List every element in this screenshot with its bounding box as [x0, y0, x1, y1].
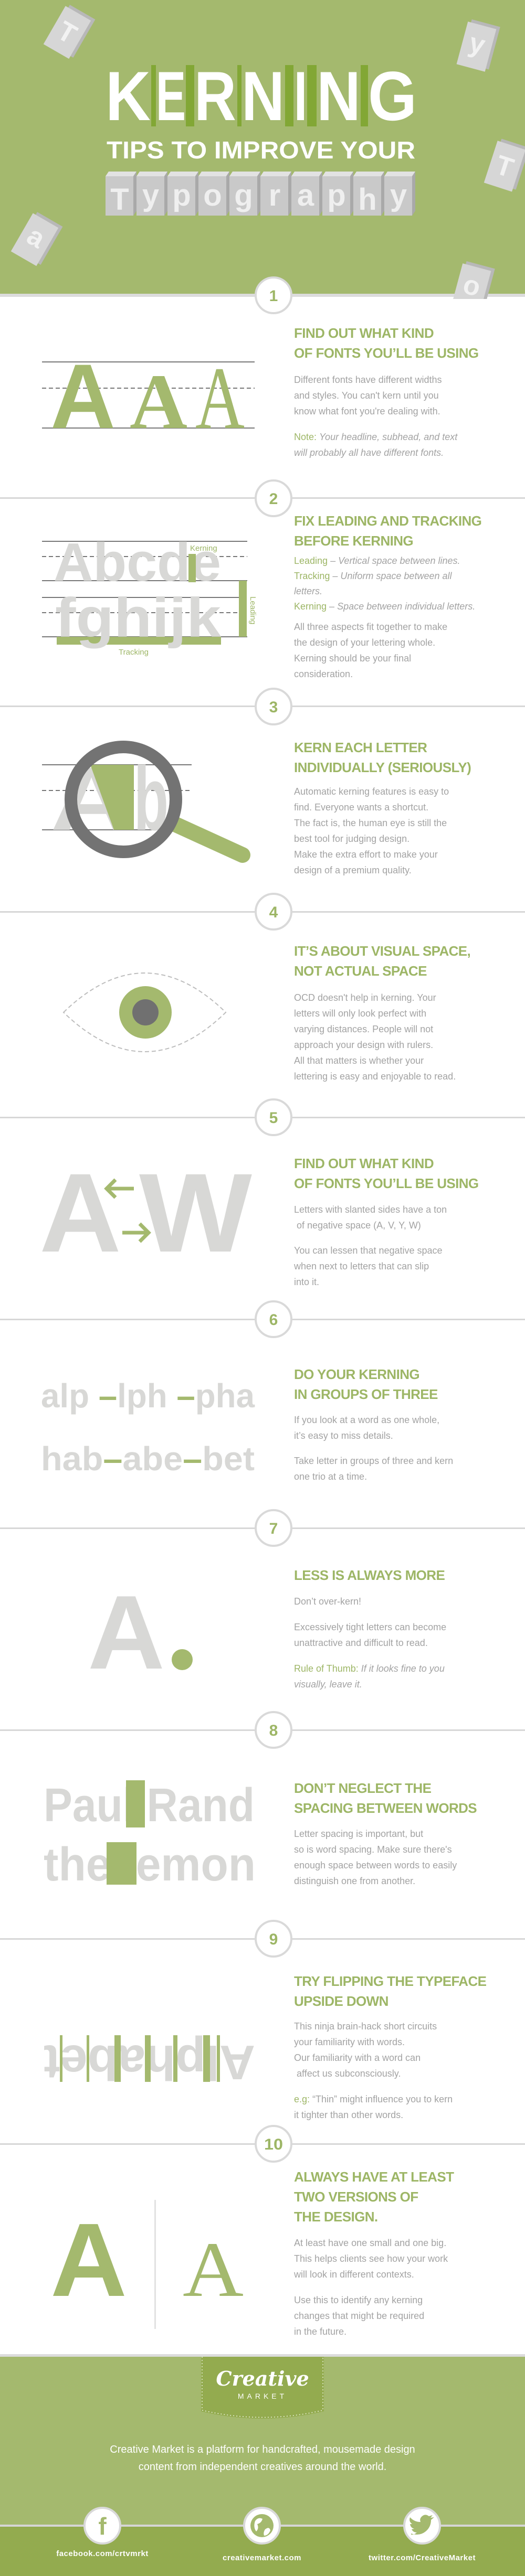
illustration 1: three A's: A	[50, 346, 116, 448]
illustration 6: groups of three: alp –lph –pha	[41, 1377, 255, 1415]
illustration 8: word spacing	[44, 1779, 256, 1891]
typography blocks: r	[269, 178, 280, 212]
tip 5 heading: FIND OUT WHAT KIND	[294, 1156, 434, 1171]
tip 3 body: find. Everyone wants a shortcut.	[294, 802, 428, 813]
tip 10 body 2: Use this to identify any kerning	[294, 2295, 423, 2305]
tip 10 body 2	[294, 2295, 424, 2337]
tile: T top left	[44, 3, 95, 60]
tip 9 heading: TRY FLIPPING THE TYPEFACE	[294, 1973, 486, 1989]
tip 6 body 2: Take letter in groups of three and kern	[294, 1456, 453, 1466]
tip 7 body 2	[294, 1622, 446, 1648]
tile: y top right: y	[466, 27, 488, 61]
tip 7 body 2: unattractive and difficult to read.	[294, 1638, 428, 1648]
tip 3 body: best tool for judging design.	[294, 833, 410, 844]
tip 10 heading: ALWAYS HAVE AT LEAST	[294, 2169, 454, 2185]
illustration 10: two versions of A: A	[50, 2202, 127, 2318]
tip 4 heading: IT’S ABOUT VISUAL SPACE,	[294, 943, 470, 959]
illustration 2: leading tracking kerning: Leading	[248, 596, 257, 624]
illustration 9: upside-down Alphabet: Alphabet	[44, 2035, 255, 2090]
badge 10: 10	[264, 2136, 283, 2153]
illustration 5: AW with arrows: W	[139, 1150, 252, 1276]
illustration 2: leading tracking kerning: Tracking	[119, 648, 149, 657]
tip 1 body: and styles. You can't kern until you	[294, 390, 439, 401]
illustration 2: leading tracking kerning: fghijk	[55, 587, 222, 649]
illustration 10: two versions of A	[50, 2200, 244, 2329]
tip 6 body: If you look at a word as one whole,	[294, 1415, 439, 1425]
illustration 1: three A's: A	[130, 358, 187, 445]
tip 10 body 2: in the future.	[294, 2326, 346, 2337]
tip 2 body: Kerning should be your final	[294, 653, 411, 664]
tip 2 definitions: Tracking – Uniform space between all	[294, 571, 452, 581]
illustration 8: word spacing: the lemon	[44, 1839, 256, 1891]
social labels: creativemarket.com	[223, 2553, 301, 2562]
badge 5: 5	[269, 1109, 278, 1127]
tip 2 definitions	[294, 555, 475, 612]
social labels: facebook.com/crtvmrkt	[56, 2549, 149, 2558]
tip 2 heading: FIX LEADING AND TRACKING	[294, 513, 481, 529]
tip 9 body: affect us subconsciously.	[297, 2068, 401, 2079]
tip 7 body 2: Excessively tight letters can become	[294, 1622, 446, 1632]
tip 4 body: lettering is easy and enjoyable to read.	[294, 1071, 456, 1082]
tip 2 definitions: Kerning – Space between individual letters.	[294, 601, 475, 612]
logo badge: MARKET	[238, 2392, 287, 2400]
tip 1 heading: OF FONTS YOU’LL BE USING	[294, 345, 479, 361]
tip 4 body: All that matters is whether your	[294, 1055, 424, 1066]
tip 5 body 2	[294, 1245, 443, 1287]
tip 1 body: know what font you're dealing with.	[294, 406, 440, 416]
tip 5 heading: OF FONTS YOU’LL BE USING	[294, 1175, 479, 1191]
tip 4 body: OCD doesn't help in kerning. Your	[294, 992, 436, 1003]
tip 9 example: e.g: “Thin” might influence you to kern	[294, 2094, 453, 2104]
badge 8: 8	[269, 1722, 278, 1739]
badge 1	[256, 277, 291, 313]
logo badge	[201, 2357, 324, 2419]
title: KERNING	[106, 58, 417, 135]
illustration 2: leading tracking kerning	[42, 532, 257, 657]
typography blocks: y	[142, 178, 159, 212]
tip 8 heading: SPACING BETWEEN WORDS	[294, 1800, 477, 1816]
tip 7 rule of thumb: visually, leave it.	[294, 1679, 362, 1690]
footer description: content from independent creatives around the world.	[139, 2461, 386, 2473]
tile: a left	[11, 210, 62, 268]
tip 8 body: distinguish one from another.	[294, 1876, 415, 1886]
tip 6 body	[294, 1415, 439, 1441]
badge 2: 2	[269, 490, 278, 508]
footer	[0, 2354, 525, 2576]
tip 2 heading	[294, 513, 481, 549]
typography blocks: T	[110, 183, 129, 217]
tip 5 heading	[294, 1156, 479, 1191]
tip 4 heading: NOT ACTUAL SPACE	[294, 963, 427, 979]
tip 10 body	[294, 2238, 448, 2280]
tip 10 body: will look in different contexts.	[294, 2269, 414, 2280]
tip 6 body 2: one trio at a time.	[294, 1471, 367, 1482]
tip 4 body: approach your design with rulers.	[294, 1040, 433, 1050]
tip 8 body: enough space between words to easily	[294, 1860, 457, 1870]
tip 9 heading: UPSIDE DOWN	[294, 1993, 388, 2009]
tip 2 heading: BEFORE KERNING	[294, 533, 413, 549]
title: KERNING: G	[368, 58, 417, 135]
tip 2 definitions: Leading – Vertical space between lines.	[294, 555, 460, 566]
badge 2	[256, 480, 291, 516]
badge 7: 7	[269, 1520, 278, 1537]
tip 1 body	[294, 375, 442, 416]
tip 2 body	[294, 622, 447, 679]
badge 6: 6	[269, 1311, 278, 1329]
badge 4	[256, 894, 291, 929]
tip 4 body	[294, 992, 456, 1082]
tip 9 example: it tighter than other words.	[294, 2110, 403, 2120]
tip 1 body: Different fonts have different widths	[294, 375, 442, 385]
illustration 10: two versions of A: A	[183, 2226, 244, 2313]
title: KERNING: N	[317, 58, 361, 135]
footer description: Creative Market is a platform for handcrafted, mousemade design	[110, 2444, 415, 2455]
tip 1 note: will probably all have different fonts.	[294, 447, 444, 458]
illustration 5: AW with arrows: A	[39, 1150, 121, 1276]
title: KERNING: N	[242, 58, 285, 135]
tip 8 body	[294, 1829, 457, 1886]
badge 9: 9	[269, 1931, 278, 1948]
title: KERNING: K	[106, 58, 151, 135]
tile: T right: T	[492, 149, 517, 184]
typography blocks: o	[203, 178, 222, 212]
tip 10 body 2: changes that might be required	[294, 2311, 424, 2321]
illustration 5: AW with arrows	[39, 1150, 252, 1276]
tip 5 body	[294, 1204, 447, 1231]
tip 8 body: so is word spacing. Make sure there's	[294, 1844, 452, 1855]
tip 3 heading: INDIVIDUALLY (SERIOUSLY)	[294, 760, 471, 775]
tip 9 body	[294, 2021, 437, 2079]
icon: facebook	[85, 2508, 120, 2543]
typography blocks: p	[172, 178, 191, 212]
illustration 6: groups of three: hab–abe–bet	[41, 1440, 255, 1478]
tip 10 heading	[294, 2169, 454, 2225]
illustration 2: leading tracking kerning: Kerning	[190, 544, 217, 553]
tile: T top left: T	[52, 16, 82, 50]
tip 9 body: your familiarity with words.	[294, 2037, 405, 2047]
footer description	[110, 2444, 415, 2473]
tip 10 heading: THE DESIGN.	[294, 2209, 378, 2225]
tip 2 definitions: letters.	[294, 586, 322, 596]
illustration 4: eye	[64, 973, 226, 1052]
icon: globe	[244, 2508, 280, 2543]
tip 10 body: This helps clients see how your work	[294, 2253, 448, 2264]
tip 3 body: design of a premium quality.	[294, 865, 412, 875]
tip 9 heading	[294, 1973, 486, 2009]
illustration 2: leading tracking kerning: Abcde	[54, 532, 221, 592]
tip 8 body: Letter spacing is important, but	[294, 1829, 423, 1839]
icon: twitter	[404, 2508, 440, 2543]
tip 7 rule of thumb	[294, 1663, 445, 1690]
tip 6 body: it’s easy to miss details.	[294, 1430, 393, 1441]
tip 3 heading: KERN EACH LETTER	[294, 740, 427, 755]
tip 1 heading	[294, 325, 479, 361]
badge 9	[256, 1921, 291, 1957]
tip 9 body: Our familiarity with a word can	[294, 2053, 421, 2063]
social labels	[56, 2549, 476, 2562]
tip 4 body: letters will only look perfect with	[294, 1008, 426, 1019]
tip 2 body: consideration.	[294, 669, 353, 679]
typography blocks: p	[327, 178, 346, 212]
typography blocks: h	[358, 183, 377, 217]
title: KERNING: E	[156, 58, 186, 135]
tip 5 body 2: You can lessen that negative space	[294, 1245, 443, 1256]
illustration 7: A.: A	[88, 1574, 165, 1691]
illustration 1: three A's	[42, 346, 255, 448]
tip 3 body	[294, 786, 449, 875]
tip 6 heading	[294, 1366, 438, 1402]
tip 6 heading: IN GROUPS OF THREE	[294, 1386, 438, 1402]
badge 10	[256, 2126, 291, 2162]
typography blocks	[106, 172, 415, 217]
tile: y top right	[457, 18, 500, 72]
illustration 3: magnifier over Ab: A	[50, 749, 132, 849]
tip 7 body: Don’t over-kern!	[294, 1596, 361, 1607]
badge 3: 3	[269, 699, 278, 716]
illustration 8: word spacing: Paul Rand	[44, 1779, 255, 1832]
tip 4 heading	[294, 943, 470, 979]
subtitle: TIPS TO IMPROVE YOUR	[107, 136, 415, 164]
badge 8	[256, 1712, 291, 1748]
tip 8 heading: DON’T NEGLECT THE	[294, 1780, 431, 1796]
tip 9 example	[294, 2094, 453, 2120]
typography blocks: a	[297, 178, 314, 212]
typography blocks: y	[390, 178, 407, 212]
tile: T right	[484, 138, 525, 193]
typography blocks: g	[234, 178, 253, 212]
tip 5 body 2: when next to letters that can slip	[294, 1261, 429, 1271]
badge 6	[256, 1301, 291, 1337]
tile: a left: a	[22, 220, 50, 254]
social labels: twitter.com/CreativeMarket	[369, 2553, 476, 2562]
tip 5 body 2: into it.	[294, 1277, 319, 1287]
illustration 1: three A's: A	[195, 349, 245, 447]
title: KERNING: R	[194, 58, 236, 135]
tip 7 rule of thumb: Rule of Thumb: If it looks fine to you	[294, 1663, 445, 1674]
tip 2 body: the design of your lettering whole.	[294, 637, 435, 648]
title: KERNING: I	[294, 58, 307, 135]
tip 6 heading: DO YOUR KERNING	[294, 1366, 419, 1382]
header	[0, 0, 525, 299]
tip 10 heading: TWO VERSIONS OF	[294, 2189, 418, 2205]
tip 3 body: Automatic kerning features is easy to	[294, 786, 449, 797]
tip 10 body: At least have one small and one big.	[294, 2238, 446, 2248]
badge 4: 4	[269, 904, 278, 921]
tip 8 heading	[294, 1780, 477, 1816]
tip 3 body: Make the extra effort to make your	[294, 849, 438, 860]
tip 5 body: of negative space (A, V, Y, W)	[297, 1220, 421, 1231]
logo badge: Creative	[216, 2367, 309, 2390]
tip 6 body 2	[294, 1456, 453, 1482]
badge 7	[256, 1510, 291, 1546]
badge 1: 1	[269, 287, 278, 305]
tip 3 heading	[294, 740, 471, 775]
tip 4 body: varying distances. People will not	[294, 1024, 433, 1034]
illustration 6: groups of three	[41, 1377, 255, 1478]
badge 5	[256, 1099, 291, 1135]
tip 9 body: This ninja brain-hack short circuits	[294, 2021, 437, 2032]
tip 1 note: Note: Your headline, subhead, and text	[294, 432, 457, 442]
tip 7 heading: LESS IS ALWAYS MORE	[294, 1567, 445, 1583]
tip 2 body: All three aspects fit together to make	[294, 622, 447, 632]
tip 1 note	[294, 432, 458, 458]
tip 3 body: The fact is, the human eye is still the	[294, 818, 447, 828]
illustration 3: magnifier over Ab: b	[134, 749, 169, 849]
icon: facebook: f	[98, 2513, 107, 2540]
tip 5 body: Letters with slanted sides have a ton	[294, 1204, 447, 1215]
illustration 3: magnifier over Ab	[42, 747, 243, 855]
tip 1 heading: FIND OUT WHAT KIND	[294, 325, 434, 341]
tile: o bottom right	[452, 260, 495, 314]
badge 3	[256, 689, 291, 724]
